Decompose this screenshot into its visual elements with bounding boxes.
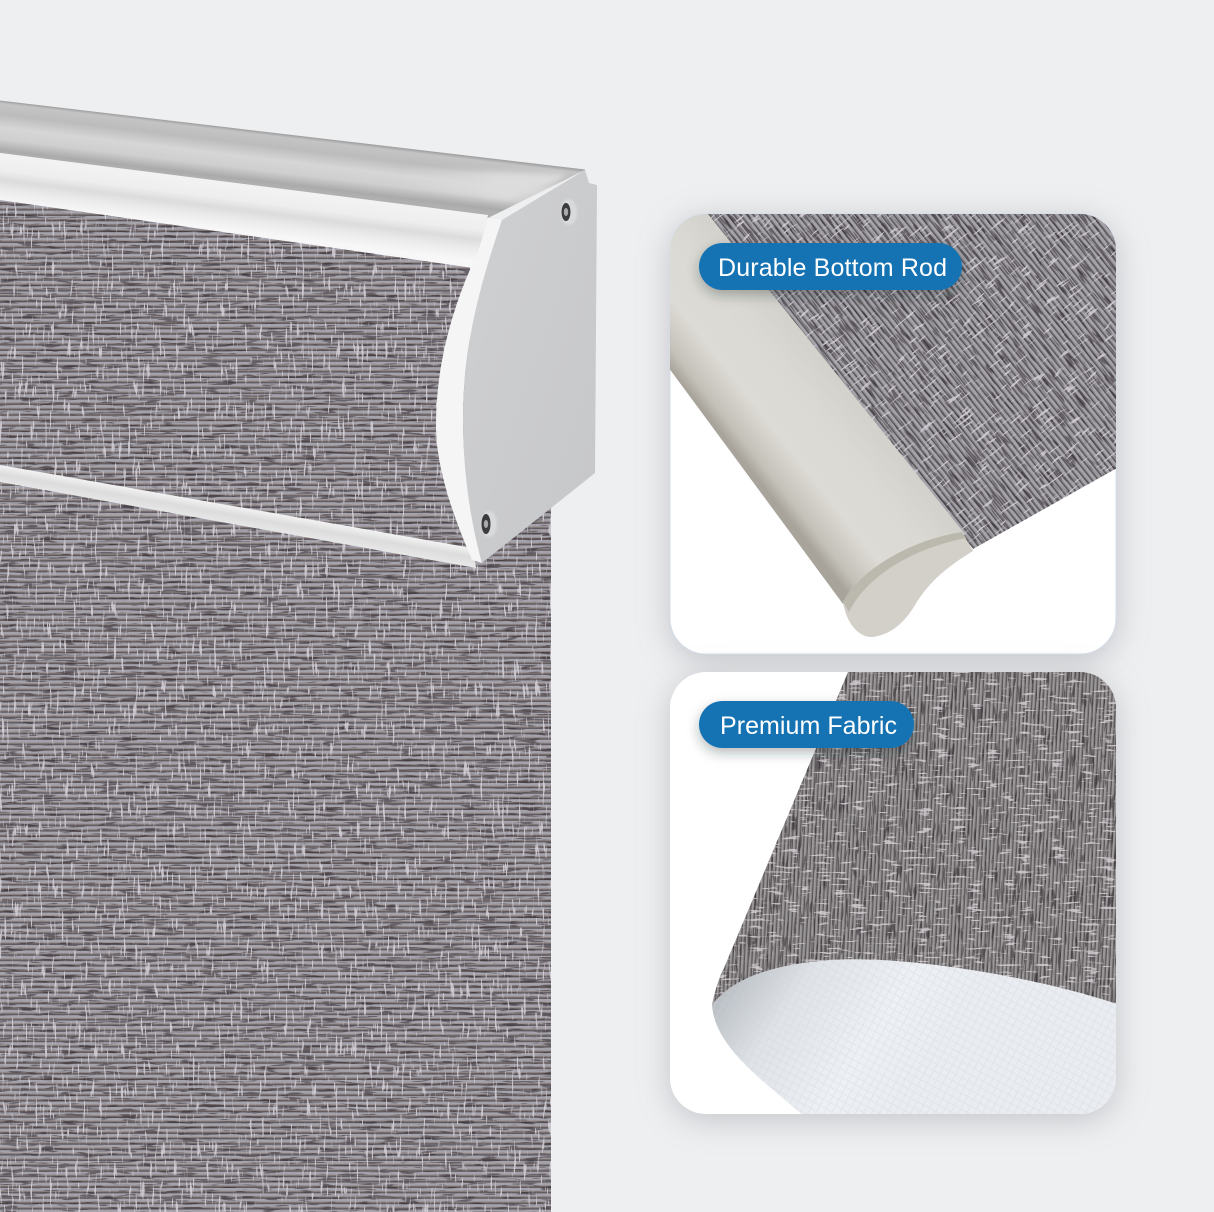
bottom rod photo [670,214,1116,637]
end cap grey plate [463,170,597,563]
top screw [561,199,577,225]
white fabric backing [712,959,1116,1114]
lower white rail of the cassette [0,465,476,568]
label pill: Durable Bottom Rod [699,243,962,290]
card: durable bottom rod [656,206,1130,672]
headrail top silver surface [0,101,585,218]
label pill: Premium Fabric [699,701,914,748]
fabric swatch [708,214,1116,549]
headrail white front band [0,153,488,268]
card background [670,672,1116,1114]
end cap white trim [436,218,502,563]
fabric panel of the shade [0,190,560,1212]
rod end cap [843,532,973,637]
curled fabric photo [712,672,1116,1114]
card background [670,214,1116,654]
main product image: roller shade with headrail [0,101,597,1212]
label pill: Durable Bottom Rod: Durable Bottom Rod [718,254,947,282]
bottom screw [481,511,497,537]
woven front face of fabric [712,672,1116,1005]
label pill: Premium Fabric: Premium Fabric [720,712,897,740]
card: premium fabric [656,666,1130,1134]
aluminium rod [660,214,965,604]
